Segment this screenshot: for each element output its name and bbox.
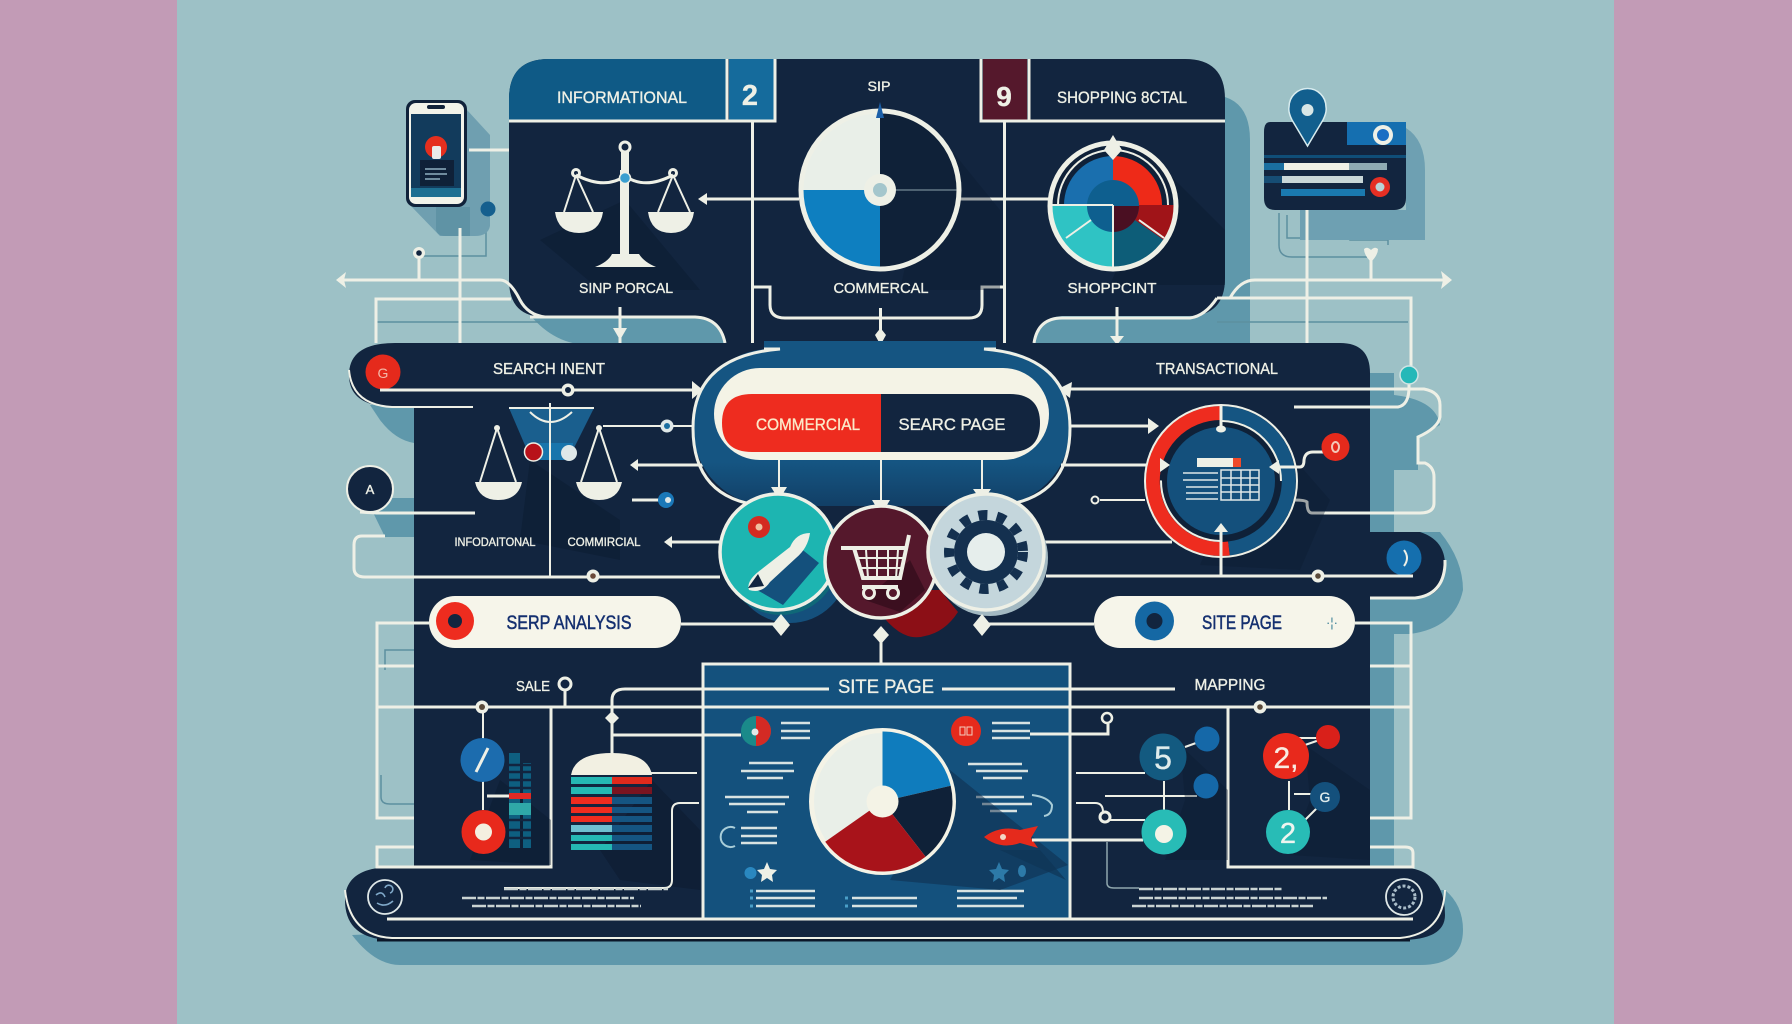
label: SEARCH INENT: SEARCH INENT [493, 361, 605, 378]
connector: search intent line [380, 381, 703, 399]
node graph: number five [1140, 726, 1228, 860]
icon: star and dot [744, 862, 848, 906]
panel: lower board with bottom bar [345, 343, 1445, 940]
icon: shopping cart circle [825, 506, 937, 618]
icon: transaction ring with table [1145, 405, 1350, 577]
header: informational: 2 [742, 80, 758, 112]
footer text: right note [1132, 889, 1327, 906]
footer bar: white rule and end ring icons [368, 879, 1422, 919]
label: commercial small: COMMIRCIAL [568, 535, 641, 549]
icon: secondary scale [475, 403, 622, 576]
header: informational [509, 59, 775, 121]
text lines: left column [725, 723, 917, 906]
label: COMMERCAL: COMMERCAL [834, 280, 928, 297]
label: SALE: SALE [516, 678, 550, 695]
hub: central oval [693, 341, 1070, 515]
label: informational small: INFODAITONAL [454, 535, 536, 549]
header: shopping [981, 59, 1225, 121]
label: MAPPING: MAPPING [1194, 677, 1266, 694]
label: SALE [516, 678, 571, 707]
connector: pills to frame [377, 614, 1411, 818]
thin teal background wires [376, 213, 1408, 804]
icon: dark star [989, 862, 1026, 882]
badge: red search marker: G [378, 365, 388, 381]
badge: teal red marker [741, 716, 771, 746]
arrows: hub to transaction ring [1045, 418, 1413, 582]
icon: smartphone [406, 100, 490, 236]
icon group: hub circles [720, 494, 1048, 637]
cast shadows of the main panels [352, 97, 1463, 965]
hub: central oval: SEARC PAGE [898, 415, 1006, 434]
connector: phone to panel [469, 148, 509, 152]
pill: SERP analysis: SERP ANALYSIS [506, 613, 632, 634]
footer text: left note [462, 889, 668, 906]
pill: site page: ·¦· [1326, 615, 1338, 630]
node graph: number two: 2, [1273, 742, 1299, 775]
icon: pin and card [1264, 88, 1425, 240]
icon: small ring marker [721, 827, 735, 847]
icon: shopping gauge [1050, 135, 1225, 285]
connector: site page title lines [605, 689, 1175, 775]
arrow: left flow [336, 228, 545, 343]
icon: balance scale [540, 142, 700, 290]
callout: circle A: A [366, 482, 375, 497]
connector: scale to hub [603, 420, 720, 548]
connector: transactional wiring [1058, 366, 1440, 513]
icon: quadrant dial [801, 102, 1000, 290]
marker: blue node [480, 202, 496, 216]
header: shopping: SHOPPING 8CTAL [1057, 88, 1187, 107]
panel dividers and connectors [530, 121, 1217, 361]
header: shopping: 9 [996, 81, 1012, 112]
pill: site page [1094, 596, 1355, 648]
pill: site page: SITE PAGE [1202, 613, 1282, 634]
connector: chart to footer note [504, 803, 699, 888]
icon: ring marker right [1032, 795, 1052, 816]
shadows under hub circles [723, 499, 1048, 637]
connector: mapping frame [1030, 700, 1413, 888]
panel: top intent board [509, 59, 1225, 361]
connector: lower left bracket [354, 536, 720, 582]
icon: red fish [984, 826, 1066, 880]
pill: SERP analysis [429, 596, 681, 648]
label: SINP PORCAL: SINP PORCAL [579, 280, 673, 297]
panel: sale chart block [377, 700, 551, 867]
marker: ring node top left [413, 247, 425, 280]
arrow: right flow [1217, 210, 1452, 372]
icon: teal wrench circle [720, 494, 836, 610]
label: TRANSACTIONAL: TRANSACTIONAL [1156, 361, 1278, 378]
chart: stacked layers [571, 753, 700, 890]
badge: red search marker [366, 354, 400, 390]
hub: central oval: COMMERCIAL [756, 415, 860, 434]
callout: circle A [347, 466, 475, 513]
label: SHOPPCINT: SHOPPCINT [1068, 280, 1156, 297]
text lines: right column [957, 723, 1032, 906]
node graph: number five: 5 [1154, 740, 1172, 776]
badge: red marker [951, 716, 981, 746]
chart: pie [812, 730, 1068, 890]
node graph: number two [1263, 725, 1370, 860]
icon: gear circle [928, 494, 1044, 610]
node graph: number two: G [1320, 789, 1330, 805]
header: informational: INFORMATIONAL [557, 88, 687, 107]
label: SIP: SIP [868, 78, 890, 94]
panel: site page frame [703, 664, 1070, 919]
label: SITE PAGE: SITE PAGE [838, 677, 934, 698]
pill: right side tab [1370, 532, 1445, 598]
node graph: number two: 2 [1280, 818, 1296, 850]
